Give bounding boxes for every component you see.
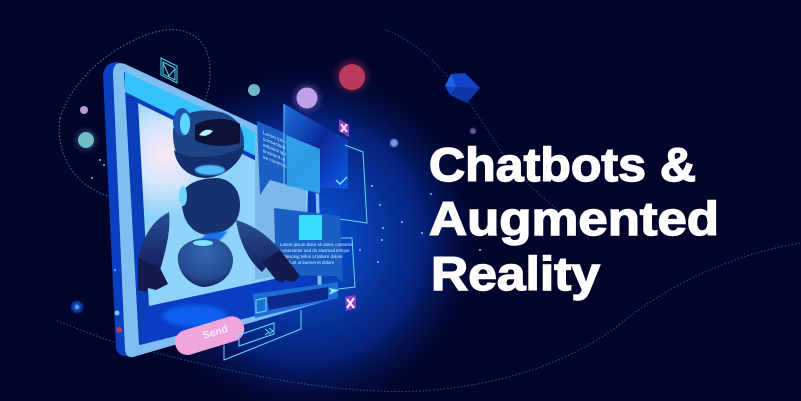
title xyxy=(429,138,719,300)
cube icon xyxy=(445,73,480,103)
message input bar xyxy=(253,282,339,318)
upper bubble text: Lorem ipsum dolor sit amet, xyxy=(263,130,320,160)
title: Augmented xyxy=(429,192,719,245)
orb: lilac xyxy=(293,84,321,112)
orb: red xyxy=(335,59,369,93)
window pane behind panels xyxy=(255,128,306,280)
monitor outer side xyxy=(103,62,335,356)
send label: Send xyxy=(201,323,229,342)
image placeholder xyxy=(299,215,322,240)
upper bubble text: consectetur adipiscing elit xyxy=(263,136,316,164)
close icon upper xyxy=(339,119,349,137)
envelope icon xyxy=(161,58,177,83)
title: Chatbots & xyxy=(429,138,696,191)
chat panel: upper text bubble xyxy=(257,121,325,195)
upper bubble text: adipiscing sed diam nonummy xyxy=(263,142,325,174)
send button xyxy=(172,313,247,358)
connector lines xyxy=(224,145,367,360)
lower bubble text: tincidunt ut laoreet et dolore xyxy=(280,260,335,265)
torso xyxy=(182,178,240,235)
screen recess xyxy=(124,72,318,345)
lower bubble text: Lorem ipsum dolor sit amet, consecte xyxy=(280,242,354,247)
orb: teal left xyxy=(75,129,97,151)
lower bubble text: consectetur sed do eiusmod tempor xyxy=(280,248,350,253)
orb: small violet xyxy=(470,128,476,134)
check mark xyxy=(336,177,347,184)
chat panel: translucent check card xyxy=(284,104,348,193)
left arm xyxy=(138,212,169,270)
robot right arm xyxy=(236,220,300,283)
orb: left blue xyxy=(71,301,83,313)
orb: monitor red xyxy=(116,327,122,333)
upper bubble text: ea commodo xyxy=(263,154,290,171)
orb: small lilac xyxy=(80,106,88,114)
lower bubble text: adipiscing tellus ut labore dolore xyxy=(280,254,343,259)
ear xyxy=(173,108,191,136)
right hand xyxy=(262,250,300,283)
upper bubble text: tincidunt ut laoreet dolore xyxy=(263,148,315,176)
screen xyxy=(138,103,308,306)
monitor xyxy=(103,62,335,357)
image icon xyxy=(256,298,266,313)
star dust xyxy=(91,159,481,271)
cyan top band xyxy=(125,72,315,185)
screen lower glow xyxy=(140,273,306,345)
head xyxy=(173,110,244,172)
chat panel: lower image bubble xyxy=(274,208,354,282)
collar light xyxy=(195,165,225,175)
forward chevrons box xyxy=(239,323,274,346)
title: Reality xyxy=(431,247,600,300)
left hand xyxy=(138,258,168,292)
send arrow xyxy=(329,288,339,295)
close icon lower xyxy=(345,295,356,311)
visor xyxy=(195,119,240,146)
robot xyxy=(138,108,244,292)
orb: small blue xyxy=(390,139,398,147)
orbs xyxy=(71,59,476,333)
orb: teal top xyxy=(248,84,260,96)
base xyxy=(178,238,233,287)
monitor frame xyxy=(113,63,322,357)
orb: monitor blue xyxy=(114,310,120,316)
